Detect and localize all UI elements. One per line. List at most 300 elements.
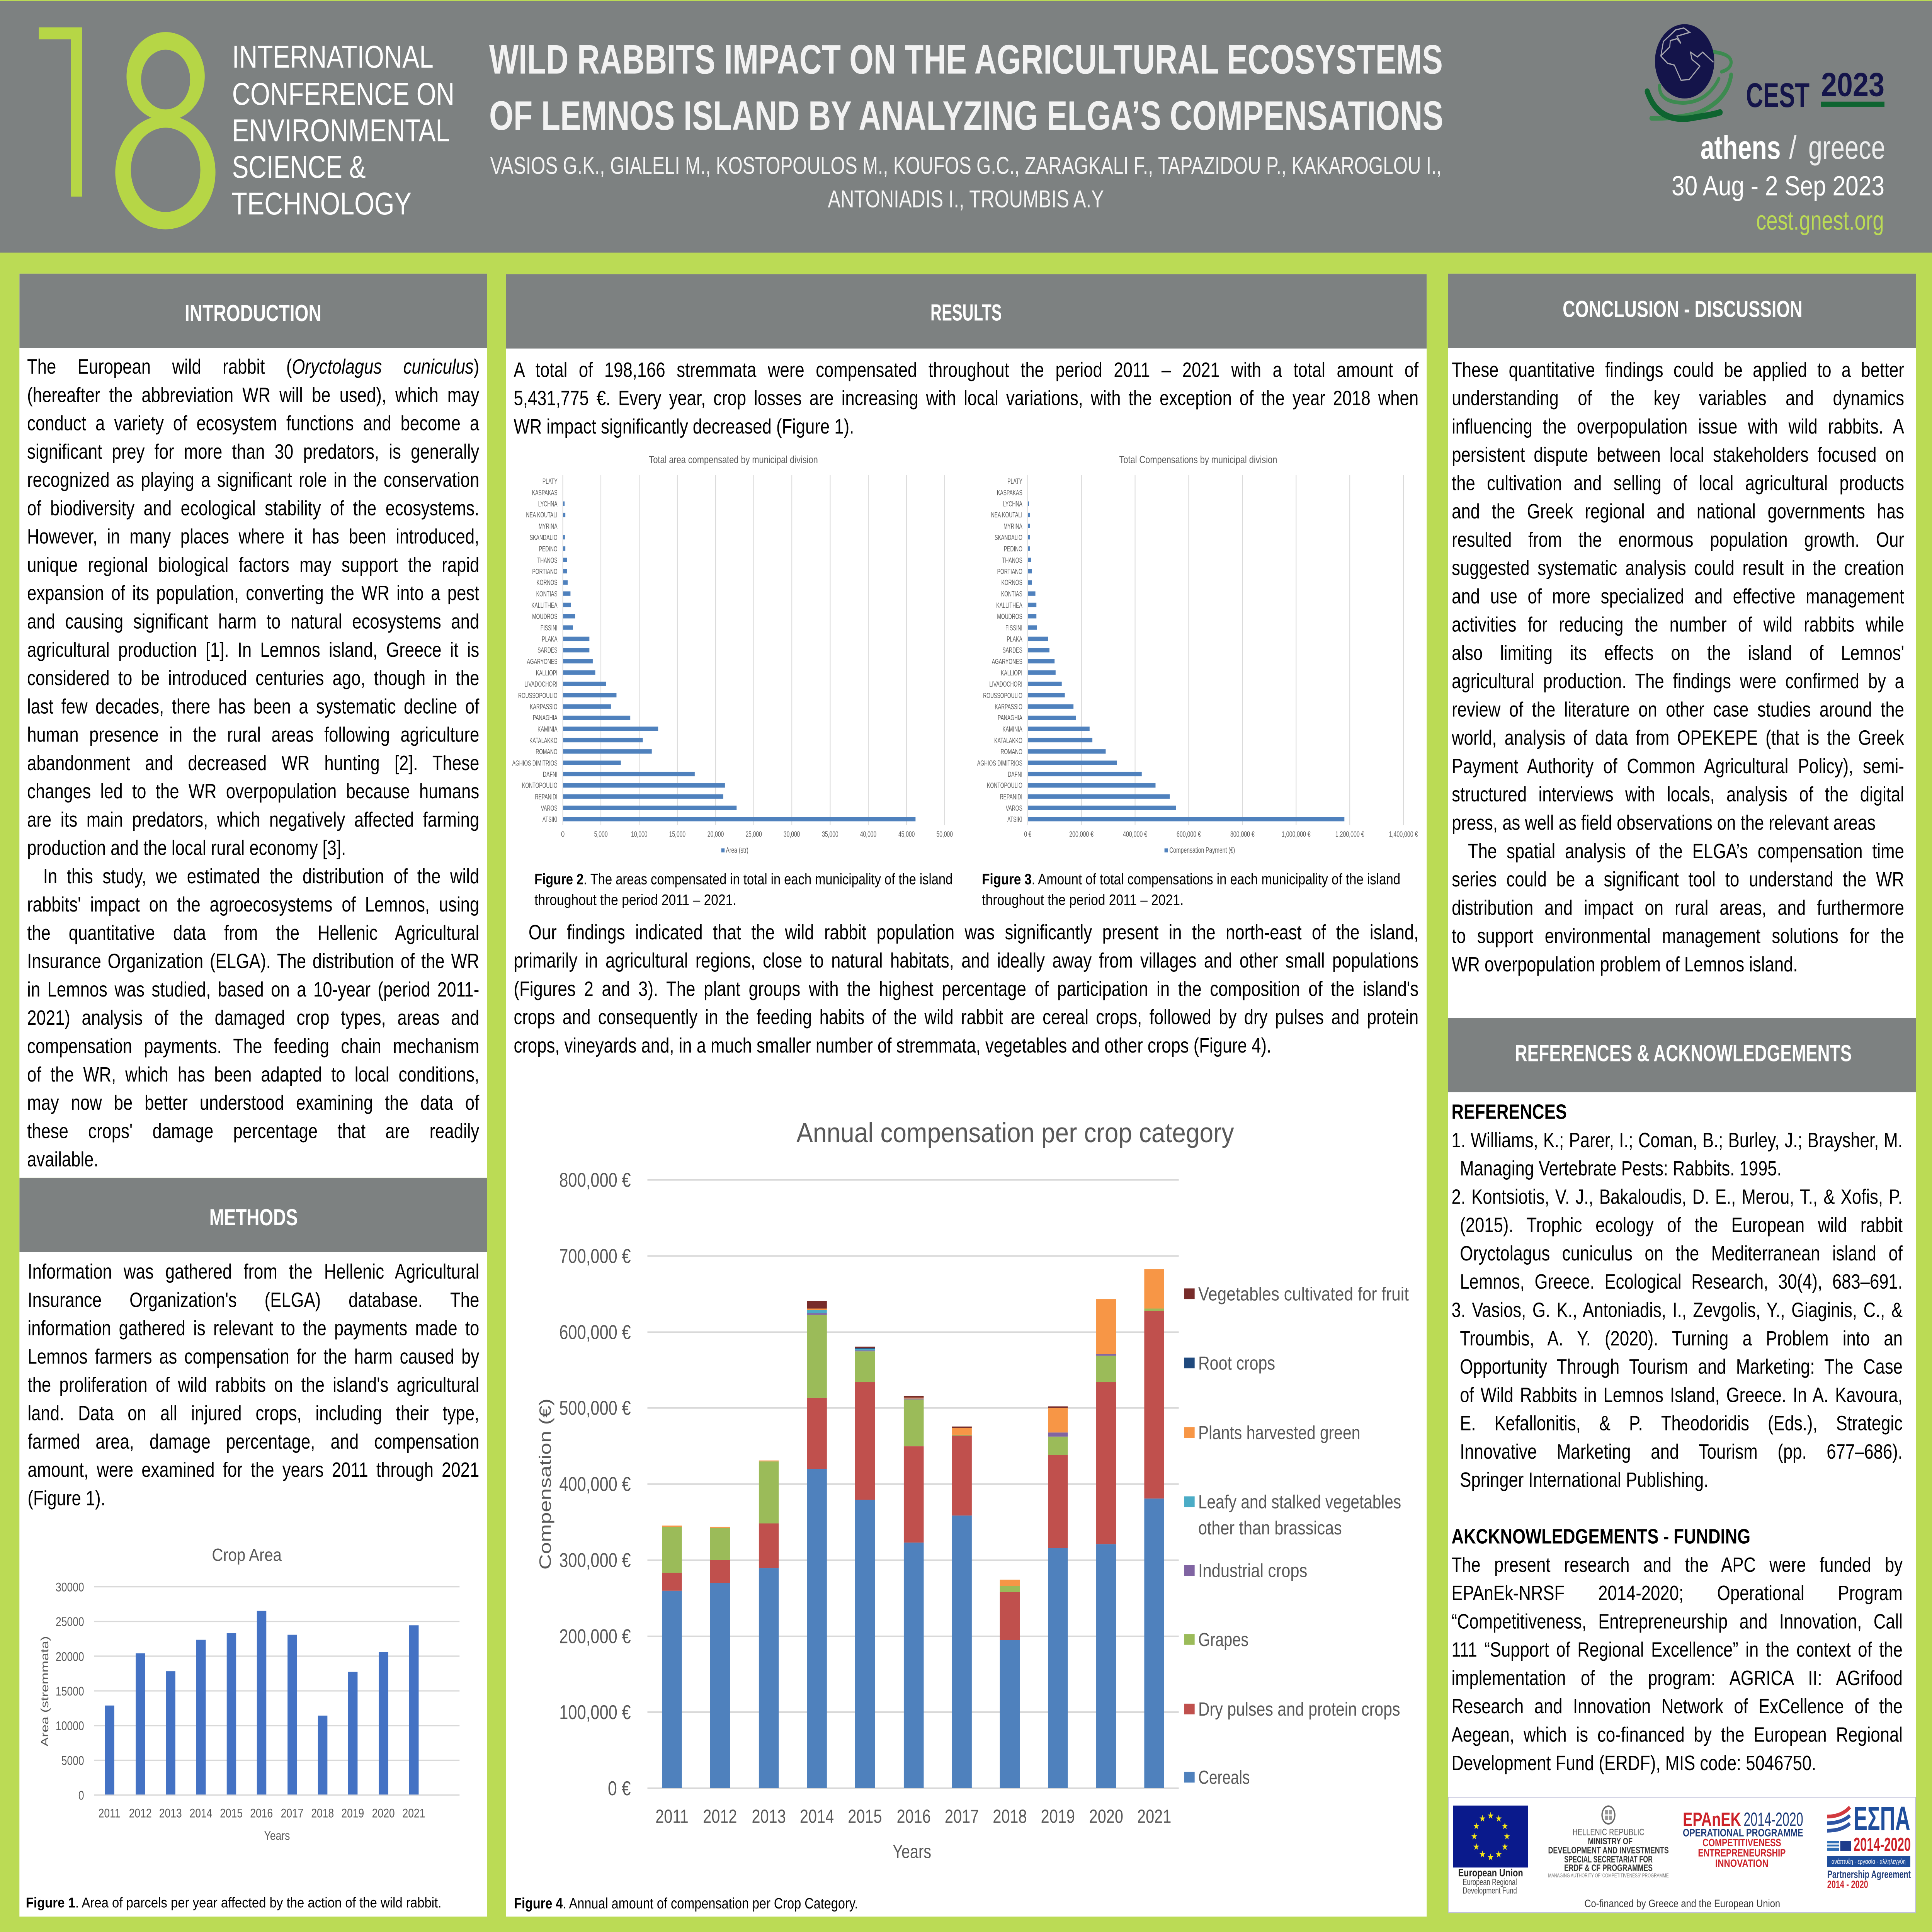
text: introduction body: expansion of its population, converting the WR into a pest bbox=[27, 581, 479, 605]
logo: EPAnEK: OPERATIONAL PROGRAMME bbox=[1683, 1827, 1803, 1839]
heading: results bbox=[506, 274, 1427, 349]
caption: figure 1: Figure 1. Area of parcels per year affected by the action of the wild rabbit. bbox=[26, 1894, 441, 1911]
logo: Hellenic Republic ministry: DEVELOPMENT AND INVESTMENTS bbox=[1548, 1845, 1669, 1855]
municipality labels: KASPAKAS bbox=[997, 488, 1022, 497]
x axis labels: 2020 bbox=[372, 1806, 395, 1820]
municipality labels: KORNOS bbox=[1002, 578, 1022, 587]
text: references list: of Wild Rabbits in Lemnos Island, Greece. In A. Kavoura, bbox=[1460, 1383, 1903, 1406]
text: introduction body: the quantitative data from the Hellenic Agricultural bbox=[27, 921, 479, 944]
text: references list: Springer International Publishing. bbox=[1460, 1468, 1708, 1491]
conference location and date: / bbox=[1789, 129, 1797, 166]
municipality labels: REPANIDI bbox=[1000, 792, 1022, 801]
text: conclusion body: and the Greek regional and national governments has bbox=[1452, 500, 1904, 523]
logo: European Union: ★ bbox=[1479, 1849, 1486, 1860]
series: leafy vegetables bbox=[807, 1310, 875, 1350]
text: acknowledgements and funding: AKCKNOWLEDGEMENTS - FUNDING bbox=[1451, 1525, 1750, 1548]
caption: figure 4: Figure 4. Annual amount of compensation per Crop Category. bbox=[514, 1895, 858, 1912]
x axis labels: 45,000 bbox=[898, 830, 915, 838]
heading: introduction: INTRODUCTION bbox=[185, 300, 321, 326]
municipality labels: PANAGHIA bbox=[533, 713, 558, 722]
caption: figure 2 bbox=[534, 871, 952, 908]
text: conclusion body: series could be a significant tool to understand the WR bbox=[1452, 867, 1904, 891]
x axis labels: 25,000 bbox=[745, 830, 762, 838]
x axis labels: 2016 bbox=[897, 1806, 931, 1827]
y axis labels bbox=[559, 1168, 631, 1799]
logo text: CEST 2023: CEST bbox=[1746, 76, 1810, 114]
text: introduction body: recognized as playing a significant role in the conservation bbox=[27, 468, 479, 492]
text: introduction body bbox=[27, 352, 479, 1173]
municipality labels: PLATY bbox=[543, 477, 558, 486]
text: references list: Opportunity Through Tourism and Marketing: The Case bbox=[1460, 1355, 1903, 1378]
conference location and date bbox=[1672, 129, 1885, 236]
y axis labels bbox=[56, 1580, 84, 1803]
municipality labels bbox=[512, 477, 558, 824]
text: references list: E. Kefallonitis, & P. Theodoridis (Eds.), Strategic bbox=[1460, 1412, 1903, 1435]
logo: Hellenic Republic ministry: HELLENIC REPUBLIC bbox=[1573, 1827, 1645, 1837]
logo: European Union: ★ bbox=[1471, 1831, 1478, 1842]
poster title bbox=[489, 36, 1443, 139]
municipality labels: ATSIKI bbox=[1007, 815, 1022, 824]
heading: methods: METHODS bbox=[209, 1204, 298, 1230]
series: cereals bbox=[662, 1469, 1164, 1788]
municipality labels: ROUSSOPOULIO bbox=[983, 691, 1022, 700]
text: conclusion body: world, analysis of data from OPEKEPE (that is the Greek bbox=[1452, 726, 1904, 749]
text: conclusion body: review of the literature on other case studies around the bbox=[1452, 698, 1904, 721]
text: results second paragraph: crops and consequently in the feeding habits of the wild rabbit are cereal crops, followed by dry pulses and protein bbox=[514, 1005, 1418, 1029]
text: conclusion body: The spatial analysis of the ELGA’s compensation time bbox=[1468, 839, 1904, 862]
heading: introduction bbox=[19, 274, 487, 348]
text: references list: 2. Kontsiotis, V. J., Bakaloudis, D. E., Merou, T., & Xofis, P. bbox=[1451, 1185, 1903, 1208]
logo: Hellenic Republic ministry: MINISTRY OF bbox=[1588, 1836, 1633, 1847]
series: dry pulses and protein crops bbox=[662, 1311, 1164, 1640]
text: introduction body: agricultural production [1]. In Lemnos island, Greece it is bbox=[27, 638, 479, 661]
text: results second paragraph: (Figures 2 and 3). The plant groups with the highest percentage of participation in the composition of the island's bbox=[514, 977, 1418, 1000]
y axis labels: 700,000 € bbox=[559, 1245, 631, 1267]
municipality labels: KALLIOPI bbox=[536, 668, 558, 677]
logo: EPAnEK bbox=[1683, 1809, 1803, 1869]
x axis labels: 2018 bbox=[311, 1806, 334, 1820]
text: conclusion body: agricultural production. The findings were confirmed by a bbox=[1452, 669, 1904, 693]
text: introduction body: Insurance Organization (ELGA). The distribution of the WR bbox=[27, 949, 479, 973]
chart: crop area bar chart (figure 1) bbox=[20, 1535, 486, 1916]
x axis labels: 2015 bbox=[220, 1806, 243, 1820]
text: introduction body: In this study, we estimated the distribution of the wild bbox=[43, 864, 479, 888]
municipality labels: SARDES bbox=[537, 646, 558, 655]
x axis labels: 2015 bbox=[848, 1806, 882, 1827]
text: references list: Managing Vertebrate Pests: Rabbits. 1995. bbox=[1460, 1156, 1782, 1180]
text: conclusion body: also limiting its effects on the island of Lemnos' bbox=[1452, 641, 1904, 664]
municipality labels: FISSINI bbox=[541, 623, 558, 632]
text: introduction body: may now be better understood examining the data of bbox=[27, 1091, 479, 1114]
municipality labels: DAFNI bbox=[1008, 770, 1022, 779]
x axis labels: 5,000 bbox=[594, 830, 608, 838]
heading: methods bbox=[19, 1178, 487, 1252]
x axis labels: Years bbox=[893, 1841, 931, 1862]
legend: Area (str) bbox=[726, 846, 748, 855]
chart: total compensations by municipal division (figure 3) bbox=[964, 450, 1423, 912]
y axis labels: 500,000 € bbox=[559, 1396, 631, 1419]
municipality labels: MYRINA bbox=[1003, 522, 1022, 531]
municipality labels: KASPAKAS bbox=[532, 488, 558, 497]
municipality labels: PORTIANO bbox=[532, 567, 558, 576]
text: conclusion body: influencing the overpopulation issue with wild rabbits. A bbox=[1452, 415, 1904, 438]
municipality labels: PLATY bbox=[1007, 477, 1022, 486]
x axis labels: 2012 bbox=[703, 1806, 737, 1827]
municipality labels: PLAKA bbox=[542, 635, 558, 643]
chart title: Total area compensated by municipal division bbox=[649, 454, 818, 465]
x axis labels bbox=[561, 830, 953, 838]
text: acknowledgements and funding: Aegean, which is co-financed by the European Regional bbox=[1451, 1723, 1903, 1746]
caption: figure 3 bbox=[982, 871, 1400, 908]
logo: Hellenic Republic ministry: ERDF & CF PROGRAMMES bbox=[1564, 1863, 1653, 1873]
heading: conclusion - discussion: CONCLUSION - DISCUSSION bbox=[1563, 296, 1803, 322]
y axis labels: 0 bbox=[78, 1789, 84, 1803]
text: conclusion body: WR overpopulation problem of Lemnos island. bbox=[1452, 952, 1798, 976]
municipality labels: FISSINI bbox=[1005, 623, 1022, 632]
x axis labels: 2017 bbox=[281, 1806, 303, 1820]
text: references list bbox=[1451, 1097, 1903, 1494]
logo: EPAnEK: ENTREPRENEURSHIP bbox=[1698, 1847, 1786, 1859]
municipality labels: ROMANO bbox=[536, 747, 558, 756]
text: introduction body: 2021) analysis of the damaged crop types, areas and bbox=[27, 1006, 479, 1029]
municipality labels: LIVADOCHORI bbox=[524, 680, 558, 689]
logo: European Union: ★ bbox=[1502, 1821, 1509, 1832]
municipality labels: SKANDALIO bbox=[995, 533, 1022, 542]
logo: European Union: ★ bbox=[1487, 1810, 1494, 1821]
x axis labels: 2019 bbox=[341, 1806, 364, 1820]
text: acknowledgements and funding: Research and Innovation Network of ExCellence of the bbox=[1451, 1694, 1903, 1718]
bars bbox=[105, 1611, 418, 1794]
text: introduction body: significant prey for more than 30 predators, is generally bbox=[27, 440, 479, 463]
text: introduction body: of biodiversity and ecological stability of the ecosystems. bbox=[27, 497, 479, 520]
municipality labels: AGARYONES bbox=[992, 657, 1022, 666]
municipality labels: ROMANO bbox=[1000, 747, 1022, 756]
text: results first paragraph bbox=[514, 355, 1418, 440]
x axis labels: 0 bbox=[561, 830, 565, 838]
logo: European Union: European Regional bbox=[1463, 1877, 1517, 1887]
text: results first paragraph: A total of 198,166 stremmata were compensated throughout the period 2011 – 2021 with a total amount of bbox=[514, 358, 1418, 381]
municipality labels: LYCHNA bbox=[1003, 500, 1022, 508]
x axis labels: 40,000 bbox=[860, 830, 876, 838]
y axis labels: 5000 bbox=[61, 1754, 84, 1768]
municipality labels: LIVADOCHORI bbox=[989, 680, 1022, 689]
municipality labels: THANOS bbox=[1002, 556, 1022, 565]
text: introduction body: compensation payments. The feeding chain mechanism bbox=[27, 1034, 479, 1058]
series: industrial crops bbox=[807, 1313, 1116, 1437]
conference name: TECHNOLOGY bbox=[231, 186, 412, 221]
conference location and date: greece bbox=[1808, 129, 1885, 166]
series: root crops bbox=[855, 1348, 875, 1349]
chart title: Crop Area bbox=[212, 1545, 282, 1565]
y axis labels: 300,000 € bbox=[559, 1549, 631, 1571]
logo: EPAnEK: 2014-2020 bbox=[1744, 1809, 1803, 1830]
municipality labels: PEDINO bbox=[1004, 544, 1022, 553]
text: methods body: Insurance Organization's (ELGA) database. The bbox=[27, 1288, 479, 1311]
municipality labels: KALLITHEA bbox=[996, 601, 1022, 609]
logo: European Union: ★ bbox=[1502, 1842, 1509, 1852]
logo text: CEST 2023 bbox=[1746, 66, 1884, 114]
logo: European Union: European Union bbox=[1458, 1867, 1523, 1879]
text: references list: Oryctolagus cuniculus on the Mediterranean island of bbox=[1460, 1242, 1903, 1265]
municipality labels: ROUSSOPOULIO bbox=[518, 691, 558, 700]
logo: Hellenic Republic ministry: SPECIAL SECRETARIAT FOR bbox=[1564, 1854, 1653, 1865]
municipality labels: KAMINIA bbox=[537, 724, 558, 733]
municipality labels: MOUDROS bbox=[997, 612, 1022, 621]
text: methods body: information gathered is relevant to the payments made to bbox=[27, 1316, 479, 1340]
heading: conclusion - discussion bbox=[1448, 274, 1916, 348]
text: conclusion body: Payment Authority of Common Agricultural Policy), semi- bbox=[1452, 754, 1904, 777]
text: methods body: Information was gathered from the Hellenic Agricultural bbox=[27, 1260, 479, 1283]
authors: VASIOS G.K., GIALELI M., KOSTOPOULOS M., KOUFOS G.C., ZARAGKALI F., TAPAZIDOU P., KAKAROGLOU I., bbox=[490, 152, 1442, 179]
municipality labels: AGHIOS DIMITRIOS bbox=[977, 759, 1022, 767]
logo: European Union: ★ bbox=[1473, 1821, 1480, 1832]
x axis labels bbox=[655, 1806, 1171, 1862]
text: references list: Lemnos, Greece. Ecological Research, 30(4), 683–691. bbox=[1460, 1270, 1903, 1293]
conference name: CONFERENCE ON bbox=[232, 77, 454, 112]
x axis labels: 10,000 bbox=[631, 830, 647, 838]
logo: European Union: ★ bbox=[1473, 1842, 1480, 1852]
municipality labels: KONTOPOULIO bbox=[522, 781, 558, 790]
x axis labels: 2013 bbox=[752, 1806, 786, 1827]
text: references list: 1. Williams, K.; Parer, I.; Coman, B.; Burley, J.; Braysher, M. bbox=[1451, 1128, 1903, 1151]
text: introduction body: conduct a variety of ecosystem functions and become a bbox=[27, 412, 479, 435]
text: conclusion body: activities for reducing the number of wild rabbits while bbox=[1452, 613, 1904, 636]
text: methods body: farmed area, damage percentage, and compensation bbox=[27, 1430, 479, 1453]
municipality labels: VAROS bbox=[541, 804, 558, 812]
logo: European Union: ★ bbox=[1495, 1813, 1502, 1824]
heading: results: RESULTS bbox=[930, 299, 1002, 326]
text: conclusion body: persistent dispute between local stakeholders focused on bbox=[1452, 443, 1904, 466]
y axis labels: 15000 bbox=[56, 1684, 84, 1698]
x axis labels: 2020 bbox=[1089, 1806, 1123, 1827]
x axis labels: 1,000,000 € bbox=[1282, 830, 1311, 838]
y axis labels: 100,000 € bbox=[559, 1701, 631, 1723]
x axis labels: 2014 bbox=[800, 1806, 834, 1827]
logo: ESPA partnership agreement bbox=[1827, 1799, 1911, 1891]
logo: European Union: Development Fund bbox=[1463, 1886, 1517, 1896]
municipality labels: KATALAKKO bbox=[529, 736, 558, 745]
chart: annual compensation per crop category (figure 4) bbox=[509, 1107, 1426, 1916]
municipality labels: MOUDROS bbox=[532, 612, 558, 621]
text: introduction body: rabbits' impact on the agroecosystems of Lemnos, using bbox=[27, 893, 479, 916]
text: introduction body: human presence in the rural areas following agriculture bbox=[27, 723, 479, 746]
municipality labels: NEA KOUTALI bbox=[991, 510, 1022, 519]
text: acknowledgements and funding: The present research and the APC were funded by bbox=[1451, 1553, 1903, 1576]
text: conclusion body: suggested systematic analysis could result in the creation bbox=[1452, 556, 1904, 580]
municipality labels: THANOS bbox=[537, 556, 558, 565]
legend: Vegetables cultivated for fruit bbox=[1198, 1283, 1409, 1304]
text: conclusion body: structured interviews with locals, analysis of the digital bbox=[1452, 782, 1904, 806]
text: acknowledgements and funding: EPAnEk-NRSF 2014-2020; Operational Program bbox=[1451, 1581, 1903, 1605]
x axis labels: 200,000 € bbox=[1069, 830, 1094, 838]
panel: conclusion and discussion bbox=[1448, 274, 1916, 1018]
municipality labels: KALLITHEA bbox=[531, 601, 558, 609]
x axis labels: 30,000 bbox=[784, 830, 800, 838]
text: results first paragraph: WR impact significantly decreased (Figure 1). bbox=[514, 415, 854, 438]
conference name: INTERNATIONAL bbox=[232, 39, 434, 75]
logo: EPAnEK: EPAnEK bbox=[1683, 1809, 1741, 1830]
x axis labels bbox=[1024, 830, 1418, 838]
legend: Leafy and stalked vegetables bbox=[1198, 1491, 1401, 1512]
icon: CEST globe logo bbox=[1647, 24, 1731, 119]
municipality labels: NEA KOUTALI bbox=[526, 510, 558, 519]
text: introduction body: are its main predators, which negatively affected farming bbox=[27, 808, 479, 831]
text: methods body: the proliferation of wild rabbits on the island's agricultural bbox=[27, 1373, 479, 1396]
text: introduction body: and causing significant harm to natural ecosystems and bbox=[27, 610, 479, 633]
x axis labels: Years bbox=[264, 1829, 290, 1843]
logo: Hellenic Republic ministry: MANAGING AUTHORITY OF 'COMPETITIVENESS' PROGRAMME bbox=[1548, 1872, 1669, 1879]
text: conclusion body: and use of more specialized and effective management bbox=[1452, 585, 1904, 608]
legend: Dry pulses and protein crops bbox=[1198, 1699, 1400, 1720]
series: grapes bbox=[662, 1309, 1164, 1592]
x axis labels: 2011 bbox=[655, 1806, 689, 1827]
municipality labels: AGHIOS DIMITRIOS bbox=[512, 759, 558, 767]
logo: EPAnEK: COMPETITIVENESS bbox=[1702, 1837, 1781, 1849]
y axis labels: 600,000 € bbox=[559, 1321, 631, 1344]
series: vegetables cultivated for fruit bbox=[807, 1301, 1068, 1428]
municipality labels: KARPASSIO bbox=[530, 702, 558, 711]
text: introduction body: However, in many places where it has been introduced, bbox=[27, 525, 479, 548]
text: methods body bbox=[27, 1257, 479, 1512]
municipality labels: KONTIAS bbox=[1001, 589, 1022, 598]
conference location and date: cest.gnest.org bbox=[1756, 206, 1884, 236]
x axis labels: 2021 bbox=[402, 1806, 425, 1820]
series: plants harvested green bbox=[662, 1269, 1164, 1586]
x axis labels: 0 € bbox=[1024, 830, 1031, 838]
x axis labels: 15,000 bbox=[669, 830, 685, 838]
authors: ANTONIADIS I., TROUMBIS A.Y bbox=[828, 185, 1104, 213]
logo: European Union: ★ bbox=[1479, 1813, 1486, 1824]
logo: ESPA partnership agreement: 2014 - 2020 bbox=[1827, 1879, 1868, 1891]
text: references list: 3. Vasios, G. K., Antoniadis, I., Zevgolis, Y., Giaginis, C., & bbox=[1451, 1298, 1903, 1321]
bars bbox=[1028, 502, 1344, 821]
y axis labels: 800,000 € bbox=[559, 1168, 631, 1191]
legend: Root crops bbox=[1198, 1352, 1275, 1374]
y axis title: Area (stremmata) bbox=[39, 1636, 51, 1747]
logo: ESPA partnership agreement: ανάπτυξη - εργασία - αλληλεγγύη bbox=[1832, 1857, 1906, 1865]
text: introduction body: available. bbox=[27, 1148, 99, 1171]
text: methods body: amount, were examined for the years 2011 through 2021 bbox=[27, 1458, 479, 1481]
y axis labels: 20000 bbox=[56, 1650, 84, 1664]
poster title: WILD RABBITS IMPACT ON THE AGRICULTURAL ECOSYSTEMS bbox=[489, 36, 1443, 82]
text: conclusion body bbox=[1452, 355, 1904, 978]
municipality labels: PANAGHIA bbox=[998, 713, 1022, 722]
text: methods body: (Figure 1). bbox=[27, 1486, 105, 1510]
co-financing note: Co-financed by Greece and the European Union bbox=[1584, 1898, 1780, 1910]
legend: other than brassicas bbox=[1198, 1517, 1342, 1539]
x axis labels: 2011 bbox=[99, 1806, 121, 1820]
text: conclusion body: distribution and impact on rural areas, and furthermore bbox=[1452, 896, 1904, 919]
x axis labels: 2012 bbox=[129, 1806, 152, 1820]
text: references list: Innovative Marketing and Tourism (pp. 677–686). bbox=[1460, 1440, 1903, 1463]
x axis labels: 2018 bbox=[993, 1806, 1027, 1827]
x axis labels: 400,000 € bbox=[1123, 830, 1147, 838]
text: results second paragraph: crops, vineyards and, in a much smaller number of stremmata, vegetables and other crops (Figure 4). bbox=[514, 1034, 1271, 1057]
y axis labels: 0 € bbox=[608, 1777, 631, 1799]
text: introduction body: of the WR, which has been adapted to local conditions, bbox=[27, 1063, 479, 1086]
conference name: SCIENCE & bbox=[232, 150, 366, 185]
text: methods body: land. Data on all injured crops, including their type, bbox=[27, 1401, 479, 1425]
text: introduction body: considered to be introduced centuries ago, though in the bbox=[27, 666, 479, 689]
caption: figure 2: throughout the period 2011 – 2021. bbox=[534, 892, 736, 908]
logo: European Union: ★ bbox=[1503, 1831, 1510, 1842]
text: acknowledgements and funding: “Competitiveness, Entrepreneurship and Innovation, Call bbox=[1451, 1610, 1903, 1633]
panel: introduction bbox=[19, 274, 487, 1178]
legend: Compensation Payment (€) bbox=[1169, 846, 1235, 855]
municipality labels: KAMINIA bbox=[1002, 724, 1022, 733]
panel: methods bbox=[19, 1178, 487, 1917]
text: introduction body: changes led to the WR overpopulation because humans bbox=[27, 779, 479, 803]
text: acknowledgements and funding: Development Fund (ERDF), MIS code: 5046750. bbox=[1451, 1751, 1816, 1774]
x axis labels bbox=[99, 1806, 425, 1843]
chart title: Total Compensations by municipal division bbox=[1119, 454, 1277, 465]
text: introduction body: in Lemnos was studied, based on a 10-year (period 2011- bbox=[27, 978, 479, 1001]
text: results first paragraph: 5,431,775 €. Every year, crop losses are increasing with local variations, with the exception of the year 2018 when bbox=[514, 386, 1418, 410]
x axis labels: 600,000 € bbox=[1177, 830, 1201, 838]
panel: references and acknowledgements bbox=[1448, 1018, 1916, 1913]
y axis labels: 30000 bbox=[56, 1580, 84, 1594]
municipality labels: DAFNI bbox=[543, 770, 558, 779]
municipality labels: REPANIDI bbox=[535, 792, 558, 801]
municipality labels: KONTOPOULIO bbox=[987, 781, 1022, 790]
authors bbox=[490, 152, 1442, 213]
municipality labels: SKANDALIO bbox=[530, 533, 558, 542]
x axis labels: 2017 bbox=[945, 1806, 979, 1827]
text: references list: REFERENCES bbox=[1451, 1100, 1567, 1123]
caption: figure 3: throughout the period 2011 – 2021. bbox=[982, 892, 1184, 908]
logo: EPAnEK: INNOVATION bbox=[1715, 1857, 1769, 1869]
header banner bbox=[0, 0, 1932, 253]
x axis labels: 35,000 bbox=[822, 830, 838, 838]
text: conclusion body: to support environmental management solutions for the bbox=[1452, 924, 1904, 947]
chart title: Annual compensation per crop category bbox=[796, 1117, 1234, 1148]
legend: Grapes bbox=[1198, 1629, 1248, 1650]
heading: references and acknowledgements bbox=[1448, 1018, 1916, 1092]
municipality labels: SARDES bbox=[1002, 646, 1022, 655]
x axis labels: 1,400,000 € bbox=[1389, 830, 1418, 838]
municipality labels: AGARYONES bbox=[527, 657, 558, 666]
logo: European Union: ★ bbox=[1487, 1852, 1494, 1863]
text: introduction body: (hereafter the abbreviation WR will be used), which may bbox=[27, 383, 479, 406]
legend: Cereals bbox=[1198, 1767, 1250, 1788]
heading: references and acknowledgements: REFERENCES & ACKNOWLEDGEMENTS bbox=[1515, 1040, 1852, 1066]
x axis labels: 800,000 € bbox=[1230, 830, 1255, 838]
logo: European Union bbox=[1453, 1806, 1528, 1896]
bars bbox=[563, 502, 915, 821]
text: introduction body: unique regional biological factors may support the rapid bbox=[27, 553, 479, 576]
text: acknowledgements and funding: 111 “Support of Regional Excellence” in the context of the bbox=[1451, 1638, 1903, 1661]
municipality labels: PLAKA bbox=[1007, 635, 1022, 643]
municipality labels: KATALAKKO bbox=[994, 736, 1022, 745]
y axis labels: 25000 bbox=[56, 1615, 84, 1629]
municipality labels: ATSIKI bbox=[543, 815, 558, 824]
text: introduction body: abandonment and decreased WR hunting [2]. These bbox=[27, 751, 479, 774]
municipality labels: MYRINA bbox=[539, 522, 558, 531]
conference location and date: 30 Aug - 2 Sep 2023 bbox=[1672, 170, 1884, 201]
conference location and date: athens bbox=[1701, 129, 1781, 166]
x axis labels: 2014 bbox=[189, 1806, 212, 1820]
logo: number 18 bbox=[38, 0, 216, 287]
chart: total area by municipal division (figure 2) bbox=[509, 450, 964, 912]
municipality labels: LYCHNA bbox=[538, 500, 558, 508]
text: introduction body: these crops' damage percentage that are readily bbox=[27, 1119, 479, 1143]
text: references list: Troumbis, A. Y. (2020). Turning a Problem into an bbox=[1460, 1327, 1903, 1350]
y axis title: Compensation (€) bbox=[536, 1398, 554, 1570]
text: conclusion body: resulted from the enormous population growth. Our bbox=[1452, 528, 1904, 551]
text: conclusion body: understanding of the key variables and dynamics bbox=[1452, 386, 1904, 410]
text: conclusion body: These quantitative findings could be applied to a better bbox=[1452, 358, 1904, 381]
legend: Industrial crops bbox=[1198, 1560, 1307, 1581]
